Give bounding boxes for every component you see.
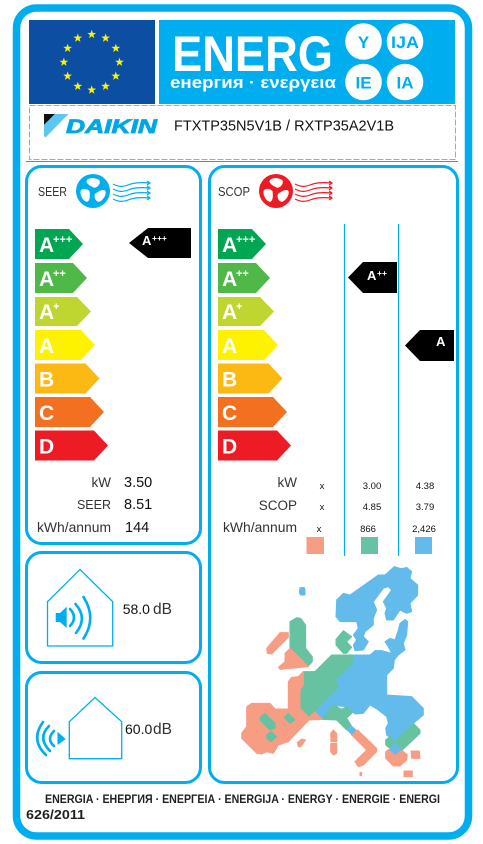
language suffix circles: IJA <box>391 33 419 52</box>
icon: house with indoor sound <box>48 570 113 646</box>
panel: SCOP <box>210 166 458 782</box>
SCOP warmer climate values <box>317 481 325 535</box>
SEER class scale: C <box>39 402 54 425</box>
SCOP average climate values: 3.00 <box>363 481 381 492</box>
SCOP warmer climate values: x <box>320 502 325 513</box>
SCOP rating arrow: colder climate <box>405 330 454 361</box>
SCOP warmer climate values: x <box>317 524 322 535</box>
SEER rating arrow <box>129 228 191 258</box>
SEER heading: SEER <box>38 185 67 199</box>
SCOP colder climate values: 4.38 <box>416 481 434 492</box>
panel: outdoor noise <box>26 672 200 782</box>
outdoor noise value: dB <box>153 721 172 738</box>
energy subtitle: енергия · ενεργεια <box>170 73 337 92</box>
SCOP average climate values: 4.85 <box>363 502 381 513</box>
SEER values: SEER <box>77 498 111 512</box>
model numbers: FTXTP35N5V1B / RXTP35A2V1B <box>174 118 394 134</box>
SEER class scale <box>35 229 108 460</box>
SCOP class scale: ++ <box>236 268 249 280</box>
SCOP heading: SCOP <box>218 185 250 199</box>
Daikin logo <box>44 114 158 138</box>
SEER values: 3.50 <box>124 475 152 491</box>
SEER class scale: B <box>39 368 54 392</box>
language suffix circles: IA <box>396 74 414 92</box>
icon: red fan with warm air <box>259 174 332 208</box>
SCOP average climate values <box>360 481 381 535</box>
SCOP colder climate values: 2,426 <box>412 524 436 535</box>
SCOP row labels: SCOP <box>259 498 297 513</box>
SCOP colder climate values <box>412 481 436 535</box>
SEER class scale: A <box>39 234 54 257</box>
SEER rating arrow: +++ <box>152 233 167 243</box>
SEER class scale: ++ <box>53 268 66 280</box>
climate colour keys <box>306 537 432 554</box>
footer energy words: ENERGIA · ЕНЕРГИЯ · ΕΝΕΡΓΕΙΑ · ENERGIJA · ENERGY · ENERGIE · ENERGI <box>45 794 440 806</box>
SCOP class scale: A <box>222 268 237 291</box>
SEER class scale: +++ <box>53 234 72 246</box>
SEER values: 8.51 <box>124 497 152 513</box>
SEER class scale: + <box>53 301 59 313</box>
climate map of Europe <box>242 567 423 777</box>
language suffix circles <box>345 23 423 100</box>
language suffix circles: Y <box>358 33 370 52</box>
panel: indoor noise <box>26 552 200 662</box>
language suffix circles: IE <box>355 74 372 92</box>
outdoor noise value: 60.0 <box>125 721 152 737</box>
SCOP class scale: A <box>222 335 237 358</box>
SCOP warmer climate values: x <box>320 481 325 492</box>
SCOP average climate values: 866 <box>360 524 376 535</box>
ENERG heading: ENERG <box>172 26 333 82</box>
SCOP class scale: A <box>222 234 237 257</box>
SEER class scale: A <box>39 301 54 324</box>
regulation number: 626/2011 <box>26 808 85 822</box>
SEER class scale: D <box>39 436 54 458</box>
SEER values: kW <box>92 475 111 490</box>
SCOP rating arrow: colder climate: A <box>436 334 446 349</box>
SCOP class scale <box>218 229 291 460</box>
SEER class scale: A <box>39 268 54 291</box>
SEER rating arrow: A <box>142 233 152 248</box>
SCOP row labels: kWh/annum <box>223 520 297 535</box>
SEER values: 144 <box>125 520 149 536</box>
EU flag <box>29 20 155 104</box>
SCOP class scale: A <box>222 301 237 324</box>
Daikin logo: DAIKIN <box>66 116 158 138</box>
SCOP class scale: C <box>222 402 237 425</box>
SCOP class scale: + <box>236 301 242 313</box>
SEER values: kWh/annum <box>37 520 111 535</box>
SCOP class scale: D <box>222 436 237 458</box>
SCOP class scale: +++ <box>236 234 255 246</box>
panel: SEER <box>26 166 200 544</box>
SEER class scale: A <box>39 335 54 358</box>
SCOP row labels: kW <box>278 475 297 490</box>
icon: house with outdoor sound <box>37 698 122 759</box>
icon: blue fan with cool air <box>76 174 150 208</box>
SCOP rating arrow: average climate: ++ <box>377 268 387 278</box>
SCOP row labels <box>223 475 297 535</box>
energy banner <box>159 20 455 104</box>
indoor noise value: dB <box>153 601 172 618</box>
SCOP colder climate values: 3.79 <box>416 502 434 513</box>
SCOP rating arrow: average climate <box>348 262 397 293</box>
indoor noise value: 58.0 <box>123 601 150 617</box>
SEER values <box>37 475 152 536</box>
SCOP class scale: B <box>222 368 237 392</box>
SCOP rating arrow: average climate: A <box>367 268 377 283</box>
